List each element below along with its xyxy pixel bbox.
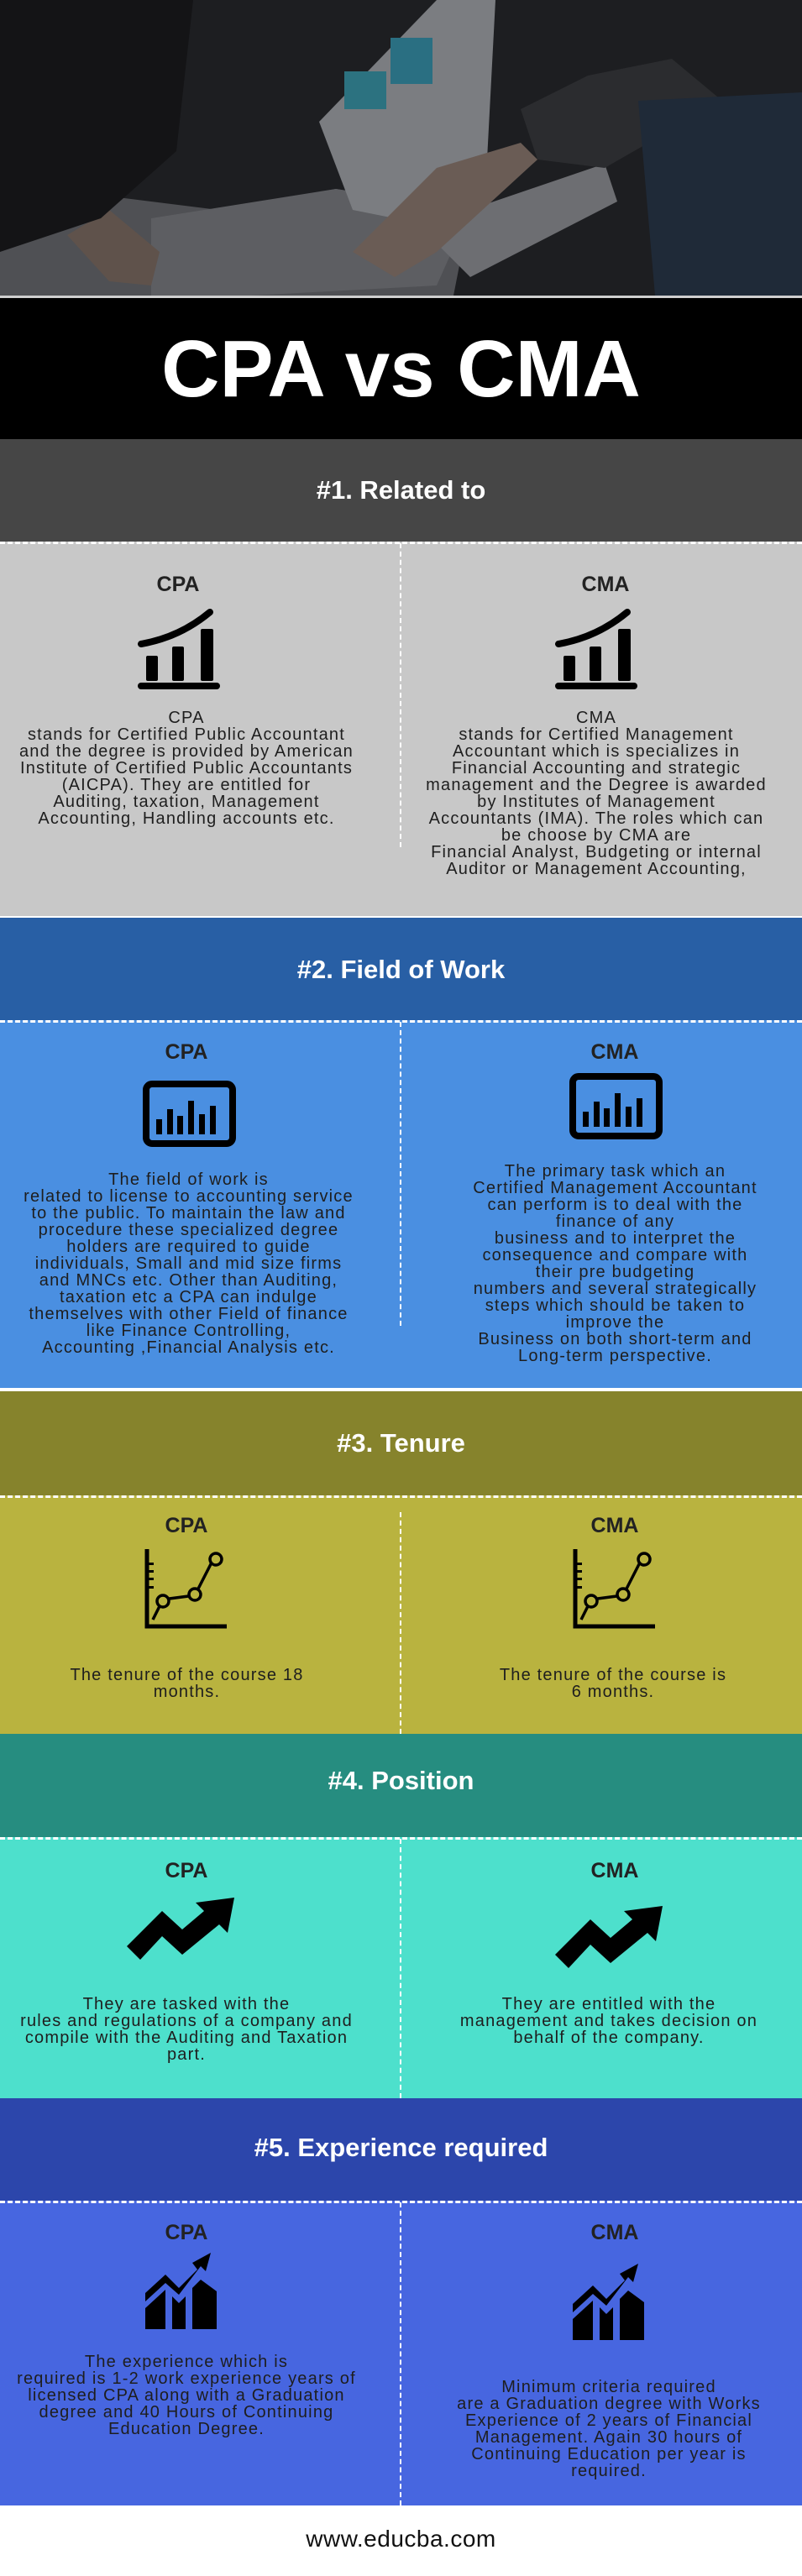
header photo bbox=[0, 0, 802, 296]
title: CPA vs CMA bbox=[161, 324, 641, 414]
icon: line graph CMA bbox=[573, 1549, 655, 1629]
icon: bar chart growth bbox=[138, 609, 220, 689]
text: CMA tenure: The tenure of the course is bbox=[500, 1666, 726, 1684]
text: CMA field: numbers and several strategically bbox=[474, 1280, 757, 1298]
icon: dashboard chart bbox=[143, 1081, 236, 1147]
text: CPA related: and the degree is provided by American bbox=[19, 742, 354, 761]
section 2 header: #2. Field of Work bbox=[297, 955, 505, 984]
text: CPA field: themselves with other Field of finance bbox=[29, 1305, 349, 1323]
section 3 header bbox=[0, 1388, 802, 1495]
text: CMA field: Long-term perspective. bbox=[518, 1347, 712, 1365]
panel: position bbox=[0, 1837, 802, 2098]
text: CPA position bbox=[20, 1995, 353, 2064]
section 2 header bbox=[0, 916, 802, 1020]
label: CMA: CMA bbox=[591, 1514, 638, 1537]
text: CMA tenure bbox=[500, 1666, 726, 1701]
text: CMA related: stands for Certified Management bbox=[459, 725, 734, 744]
text: CMA tenure: 6 months. bbox=[572, 1683, 654, 1701]
footer url: www.educba.com bbox=[306, 2526, 496, 2552]
section 5 header: #5. Experience required bbox=[254, 2133, 548, 2162]
text: CPA related: stands for Certified Public Accountant bbox=[28, 725, 345, 744]
text: CMA related: be choose by CMA are bbox=[501, 826, 691, 845]
panel: related to bbox=[0, 542, 802, 916]
text: CMA experience: Minimum criteria required bbox=[501, 2378, 716, 2396]
label: CMA: CMA bbox=[582, 573, 629, 596]
text: CPA field: individuals, Small and mid size firms bbox=[35, 1254, 342, 1273]
text: CPA field: taxation etc a CPA can indulge bbox=[60, 1288, 317, 1306]
text: CPA field: and MNCs etc. Other than Auditing, bbox=[39, 1271, 338, 1290]
text: CMA field: finance of any bbox=[556, 1212, 674, 1231]
label: CPA: CPA bbox=[165, 1514, 207, 1537]
text: CMA related: Auditor or Management Accounting, bbox=[446, 860, 747, 878]
label: CPA: CPA bbox=[157, 573, 199, 596]
text: CMA field: business and to interpret the bbox=[495, 1229, 736, 1248]
icon: dashboard chart CMA bbox=[569, 1073, 663, 1139]
panel: experience bbox=[0, 2201, 802, 2505]
text: CMA field: The primary task which an bbox=[505, 1162, 726, 1181]
text: CPA field: holders are required to guide bbox=[66, 1238, 311, 1256]
text: CPA experience: licensed CPA along with a Graduation bbox=[28, 2386, 345, 2405]
text: CPA experience: required is 1-2 work experience years of bbox=[17, 2369, 356, 2388]
text: CMA field: their pre budgeting bbox=[536, 1263, 695, 1281]
text: CPA related: (AICPA). They are entitled for bbox=[62, 776, 311, 794]
label: CMA: CMA bbox=[591, 1859, 638, 1882]
text: CPA experience: The experience which is bbox=[85, 2353, 288, 2371]
text: CMA related: CMA bbox=[576, 709, 616, 727]
text: CPA field: procedure these specialized degree bbox=[39, 1221, 338, 1239]
section 5 header bbox=[0, 2098, 802, 2201]
text: CPA field: related to license to accounting service bbox=[24, 1187, 354, 1206]
section 3 header: #3. Tenure bbox=[337, 1428, 465, 1458]
text: CPA related: Accounting, Handling accounts etc. bbox=[38, 809, 335, 828]
panel: tenure bbox=[0, 1495, 802, 1734]
text: CPA related: Auditing, taxation, Management bbox=[53, 793, 320, 811]
text: CPA tenure: months. bbox=[154, 1683, 220, 1701]
text: CMA related bbox=[426, 709, 767, 878]
icon: trend arrow CMA bbox=[555, 1906, 663, 1968]
text: CMA field: Certified Management Accountant bbox=[473, 1179, 757, 1197]
text: CMA related: Financial Analyst, Budgeting or internal bbox=[431, 843, 762, 861]
text: CMA related: Financial Accounting and strategic bbox=[452, 759, 741, 778]
text: CPA tenure bbox=[70, 1666, 304, 1701]
text: CPA field: like Finance Controlling, bbox=[86, 1322, 291, 1340]
text: CMA position bbox=[460, 1995, 757, 2047]
text: CMA position: behalf of the company. bbox=[513, 2029, 705, 2047]
text: CMA experience bbox=[457, 2378, 761, 2480]
text: CMA related: Accountants (IMA). The roles which can bbox=[429, 809, 763, 828]
icon: growth bars bbox=[145, 2253, 217, 2329]
text: CPA position: They are tasked with the bbox=[83, 1995, 290, 2013]
text: CMA experience: Management. Again 30 hours of bbox=[475, 2428, 742, 2447]
text: CMA experience: Continuing Education per year is bbox=[471, 2445, 747, 2463]
text: CMA field: Business on both short-term and bbox=[478, 1330, 752, 1348]
icon: trend arrow bbox=[127, 1898, 234, 1960]
icon: bar chart growth CMA bbox=[555, 609, 637, 689]
icon: growth bars CMA bbox=[573, 2264, 644, 2340]
panel: field of work bbox=[0, 1020, 802, 1388]
text: CPA related: Institute of Certified Public Accountants bbox=[20, 759, 353, 778]
label: CPA: CPA bbox=[165, 1040, 207, 1064]
text: CPA position: rules and regulations of a company and bbox=[20, 2012, 353, 2030]
label: CMA: CMA bbox=[591, 2221, 638, 2244]
icon: line graph bbox=[144, 1549, 227, 1629]
text: CMA experience: Experience of 2 years of Financial bbox=[465, 2411, 752, 2430]
text: CPA experience bbox=[17, 2353, 356, 2438]
text: CPA field: Accounting ,Financial Analysis etc. bbox=[42, 1338, 335, 1357]
text: CPA related bbox=[19, 709, 354, 828]
text: CPA field bbox=[24, 1170, 354, 1357]
text: CPA experience: Education Degree. bbox=[108, 2420, 265, 2438]
text: CPA tenure: The tenure of the course 18 bbox=[70, 1666, 304, 1684]
text: CMA field: steps which should be taken to bbox=[485, 1296, 745, 1315]
text: CPA field: to the public. To maintain the law and bbox=[31, 1204, 346, 1223]
text: CMA related: by Institutes of Management bbox=[477, 793, 716, 811]
text: CMA position: They are entitled with the bbox=[502, 1995, 716, 2013]
section 1 header: #1. Related to bbox=[317, 475, 485, 505]
label: CMA: CMA bbox=[591, 1040, 638, 1064]
text: CPA related: CPA bbox=[168, 709, 205, 727]
text: CMA field bbox=[473, 1162, 757, 1365]
title bar bbox=[0, 296, 802, 439]
text: CMA experience: required. bbox=[571, 2462, 647, 2480]
text: CMA related: Accountant which is specializes in bbox=[453, 742, 740, 761]
text: CMA related: management and the Degree is awarded bbox=[426, 776, 767, 794]
text: CMA field: consequence and compare with bbox=[482, 1246, 747, 1264]
text: CPA position: part. bbox=[167, 2045, 206, 2064]
label: CPA: CPA bbox=[165, 1859, 207, 1882]
section 1 header bbox=[0, 439, 802, 542]
text: CPA position: compile with the Auditing and Taxation bbox=[25, 2029, 348, 2047]
text: CMA field: can perform is to deal with the bbox=[487, 1196, 742, 1214]
text: CMA experience: are a Graduation degree with Works bbox=[457, 2395, 761, 2413]
section 4 header: #4. Position bbox=[328, 1766, 474, 1795]
text: CPA experience: degree and 40 Hours of Continuing bbox=[39, 2403, 333, 2422]
text: CPA field: The field of work is bbox=[108, 1170, 269, 1189]
label: CPA: CPA bbox=[165, 2221, 207, 2244]
text: CMA position: management and takes decision on bbox=[460, 2012, 757, 2030]
text: CMA field: improve the bbox=[566, 1313, 664, 1332]
section 4 header bbox=[0, 1734, 802, 1837]
